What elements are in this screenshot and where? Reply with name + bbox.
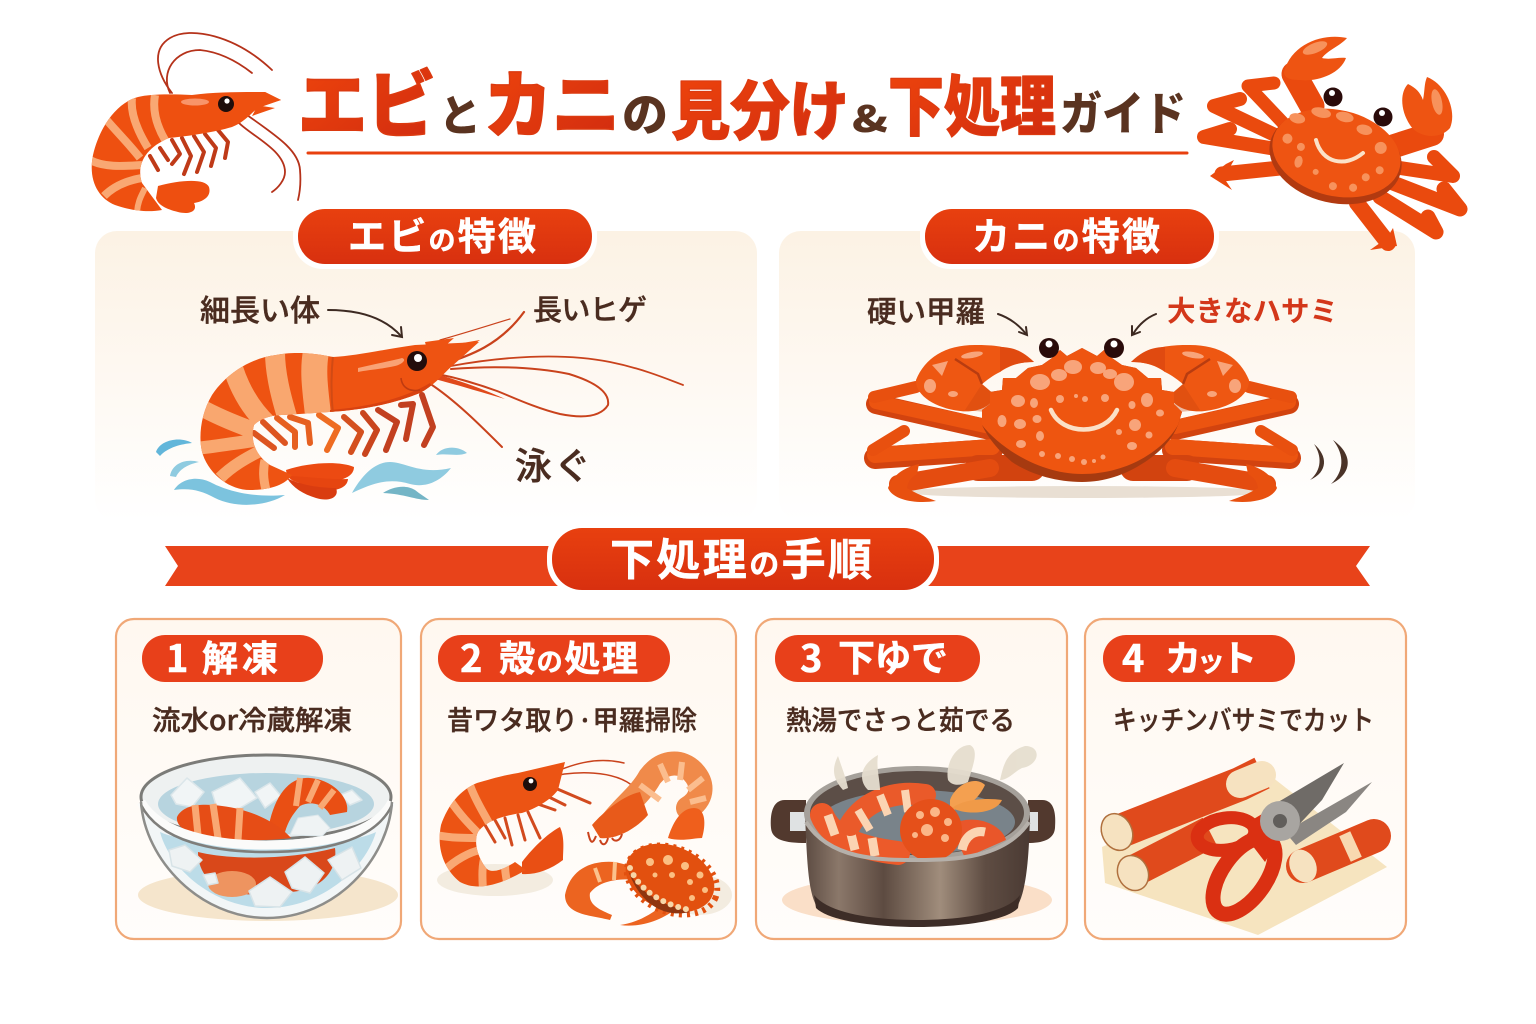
eye [407,351,427,371]
card: step 1 thaw [116,619,401,939]
step pill [438,628,670,683]
crab leg 3 [1284,836,1374,887]
crab shell [1260,96,1411,217]
food [822,815,898,853]
card: step 3 boil [756,619,1067,939]
step pill [1103,628,1295,683]
title text: カニ [484,47,620,153]
step pill: 1 [166,628,188,683]
body [200,342,479,490]
card: step 2 shell [421,619,736,939]
step pill: 3 [800,628,822,683]
rim front [141,802,392,845]
step pill: カット [1165,630,1257,682]
label: long whiskers: 長いヒゲ [533,287,647,329]
step pill: 下ゆで [838,628,948,682]
illustration: shrimp and crab [436,761,732,927]
illustration: main crab [873,338,1292,502]
illustration: waves [156,440,467,505]
icon: header crab [1204,37,1460,250]
icon: header shrimp [90,33,300,213]
right legs and claw [1131,345,1292,502]
peeled shrimp [588,762,706,844]
panel: shrimp features [95,204,757,521]
tail fan [286,463,354,500]
label: swims: 泳ぐ [515,436,591,490]
title [298,47,1187,153]
crab leg 2 [1112,832,1210,896]
title text [298,47,1186,153]
ribbon [165,546,1370,586]
step pill: 解凍 [202,630,278,682]
crab shell [982,348,1182,482]
step pill: 2 [460,628,482,683]
title text: の [622,79,668,145]
legs [254,395,433,454]
crab leg 1 [1095,773,1262,856]
left legs and claw [873,345,1034,502]
step pill: 4 [1122,628,1144,683]
illustration: crab legs and scissors [1095,763,1387,935]
pot body [805,815,1030,926]
section banner [165,524,1370,594]
panel: crab features [779,204,1415,521]
handles [771,800,806,843]
step text: 昔ワタ取り·甲羅掃除 [447,699,697,738]
banner pill: 下処理の手順 [610,524,872,588]
submerged shrimp [198,848,335,895]
step pill: 殻の処理 [499,630,638,682]
eye [218,96,234,112]
step text: 流水or冷蔵解凍 [152,699,352,738]
label: big claws: 大きなハサミ [1167,296,1338,328]
heading pill: カニの特徴 [972,206,1160,261]
label: hard shell: 硬い甲羅 [867,289,985,331]
title text: 見分け [671,61,849,153]
title text: 下処理 [888,54,1056,150]
cutting board [1102,773,1387,935]
arrow [998,314,1027,335]
heading pill [293,204,597,269]
illustration: ice bowl [138,755,398,921]
submerged ice [169,845,361,907]
label: slender body: 細長い体 [200,286,320,330]
step pill [142,628,323,683]
panel background [779,231,1415,521]
eyes [1324,88,1392,126]
arrow [328,310,402,337]
scissors [1195,763,1372,925]
step text: キッチンバサミでカット [1113,699,1374,738]
steam [834,745,1037,790]
heading pill [920,204,1219,269]
heading pill: エビの特徴 [348,206,536,261]
arrow [1132,314,1156,335]
title underline [308,152,1187,154]
card: step 4 cut [1085,619,1406,939]
motion lines [1310,440,1348,484]
title text: & [852,91,888,143]
title text: と [439,82,481,144]
shrimp in bowl [269,778,347,832]
ice cubes [171,778,362,811]
title text: ガイド [1060,78,1186,144]
step text: 熱湯でさっと茹でる [786,699,1015,738]
eyes [1039,338,1124,358]
panel background [95,231,757,521]
illustration: pot [771,745,1055,927]
banner pill [547,524,939,594]
step pill [775,628,980,683]
title text: エビ [298,47,436,153]
illustration: main shrimp [200,312,683,500]
crab [565,831,728,927]
